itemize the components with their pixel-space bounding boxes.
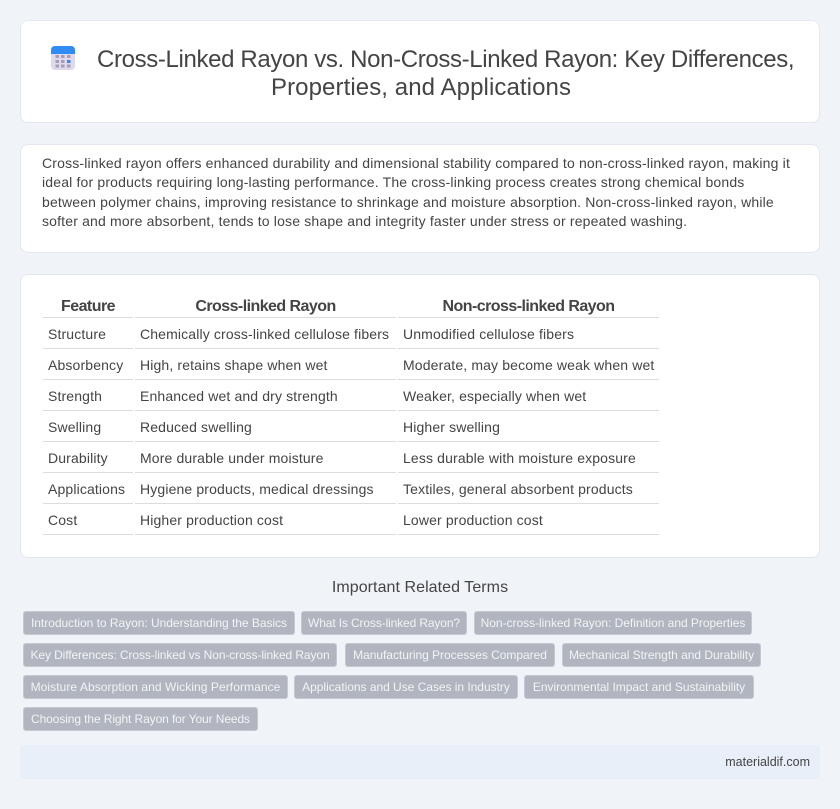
tag: Environmental Impact and Sustainability (533, 680, 745, 694)
text block: introduction: ideal for products requiring long-lasting performance. The cross-linking process creates strong chemical bonds (42, 174, 744, 190)
table header: feature: Feature (61, 298, 115, 315)
row: strength: Weaker, especially when wet (403, 388, 586, 404)
panel: header (20, 20, 820, 123)
row: applications (48, 481, 633, 497)
row: durability (48, 450, 636, 466)
tag (23, 611, 295, 635)
tag list (23, 611, 761, 731)
heading: important related terms: Important Related Terms (332, 579, 508, 596)
row: swelling: Swelling (48, 419, 101, 435)
table header: non-cross-linked rayon: Non-cross-linked Rayon (443, 298, 614, 315)
tag: What Is Cross-linked Rayon? (308, 616, 460, 630)
text block: introduction: softer and more absorbent, tends to lose shape and integrity faster under stress or repeated washing. (42, 213, 687, 229)
tag (474, 611, 752, 635)
row: durability: More durable under moisture (140, 450, 324, 466)
title: Cross-Linked Rayon vs. Non-Cross-Linked Rayon: Key Differences, (97, 46, 794, 73)
tag: Key Differences: Cross-linked vs Non-cross-linked Rayon (30, 648, 330, 662)
row: cost: Cost (48, 512, 77, 528)
tag: Moisture Absorption and Wicking Performance (31, 680, 280, 694)
tag: Mechanical Strength and Durability (569, 648, 754, 662)
row: durability: Less durable with moisture exposure (403, 450, 636, 466)
row: structure: Chemically cross-linked cellulose fibers (140, 326, 389, 342)
tag (23, 643, 337, 667)
tag: Introduction to Rayon: Understanding the Basics (31, 616, 287, 630)
row: absorbency: High, retains shape when wet (140, 357, 328, 373)
text block: introduction: Cross-linked rayon offers enhanced durability and dimensional stability compared to non-cross-linked rayon, making it (42, 155, 790, 171)
tag (23, 675, 288, 699)
footer source text: materialdif.com (725, 755, 810, 769)
table header: cross-linked rayon: Cross-linked Rayon (195, 298, 336, 315)
row: applications: Textiles, general absorbent products (403, 481, 633, 497)
tag: Choosing the Right Rayon for Your Needs (31, 712, 250, 726)
row: structure (48, 326, 574, 342)
row: strength: Strength (48, 388, 102, 404)
tag (294, 675, 518, 699)
row: swelling (48, 419, 500, 435)
row: cost: Lower production cost (403, 512, 543, 528)
tag: Manufacturing Processes Compared (353, 648, 547, 662)
row: strength (48, 388, 586, 404)
row: applications: Applications (48, 481, 125, 497)
title (97, 46, 794, 101)
row: swelling: Reduced swelling (140, 419, 252, 435)
tag: Applications and Use Cases in Industry (302, 680, 510, 694)
tag (524, 675, 754, 699)
row: absorbency: Absorbency (48, 357, 123, 373)
row: swelling: Higher swelling (403, 419, 500, 435)
row: structure: Structure (48, 326, 106, 342)
text block: introduction: between polymer chains, improving resistance to shrinkage and moisture absorption. Non-cross-linked rayon, while (42, 194, 774, 210)
tag (345, 643, 555, 667)
icon: calendar grid (51, 46, 75, 70)
tag (23, 707, 258, 731)
row: cost (48, 512, 543, 528)
row: applications: Hygiene products, medical dressings (140, 481, 374, 497)
row: strength: Enhanced wet and dry strength (140, 388, 338, 404)
tag (301, 611, 467, 635)
tag (562, 643, 761, 667)
title: Properties, and Applications (271, 74, 571, 101)
panel: introduction (20, 144, 820, 253)
text block: introduction (42, 155, 790, 229)
panel: comparison table (20, 274, 820, 558)
row: cost: Higher production cost (140, 512, 283, 528)
row: structure: Unmodified cellulose fibers (403, 326, 574, 342)
row: absorbency (48, 357, 654, 373)
footer bar (20, 745, 820, 779)
row: absorbency: Moderate, may become weak when wet (403, 357, 654, 373)
tag: Non-cross-linked Rayon: Definition and Properties (481, 616, 745, 630)
row: durability: Durability (48, 450, 108, 466)
